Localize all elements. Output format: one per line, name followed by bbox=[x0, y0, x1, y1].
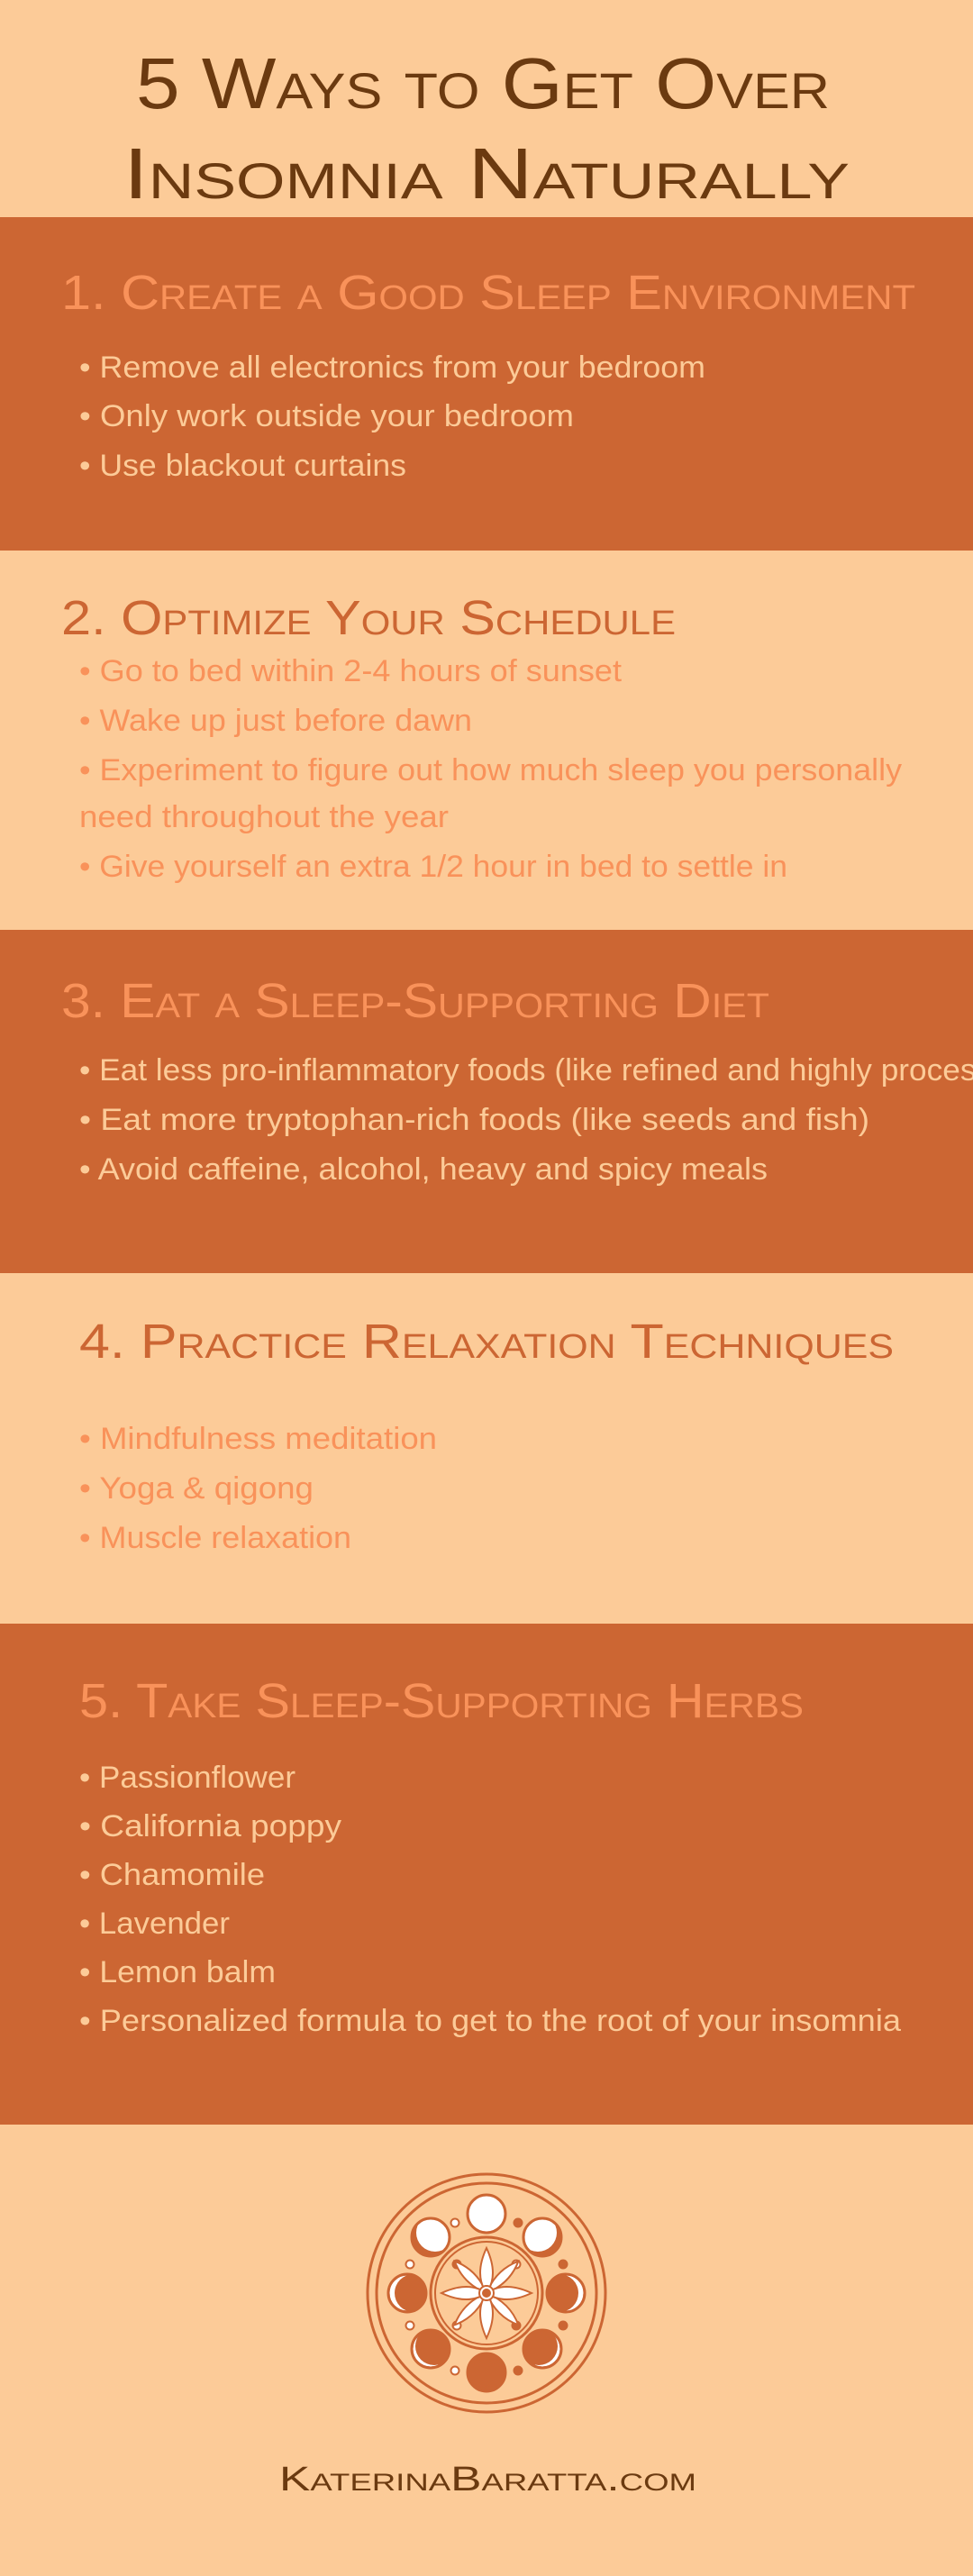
bullets 2: • Wake up just before dawn bbox=[79, 704, 472, 738]
bullets 5: • Passionflower bbox=[79, 1761, 296, 1795]
panel: 3 diet bbox=[0, 930, 973, 1273]
panel: 1 sleep environment bbox=[0, 217, 973, 551]
bullets 2: • Experiment to figure out how much sleep you personally bbox=[79, 753, 902, 787]
bullets 3: • Avoid caffeine, alcohol, heavy and spicy meals bbox=[79, 1152, 768, 1187]
bullets 4 bbox=[79, 1422, 437, 1555]
title bbox=[123, 43, 850, 214]
bullets 3 bbox=[79, 1053, 973, 1187]
bullets 4: • Muscle relaxation bbox=[79, 1521, 351, 1555]
title: 5 Ways to Get Over bbox=[136, 43, 830, 123]
bullets 5: • Personalized formula to get to the root of your insomnia bbox=[79, 2004, 901, 2038]
icon: moon phase logo bbox=[368, 2174, 605, 2412]
bullets 2: • Go to bed within 2-4 hours of sunset bbox=[79, 654, 623, 688]
panel: 4 relaxation bbox=[0, 1273, 973, 1624]
bullets 1: • Only work outside your bedroom bbox=[79, 399, 574, 433]
bullets 5: • California poppy bbox=[79, 1809, 341, 1843]
panel: 5 herbs bbox=[0, 1624, 973, 2125]
bullets 5: • Chamomile bbox=[79, 1858, 265, 1892]
title: Insomnia Naturally bbox=[123, 133, 850, 214]
dots bbox=[405, 2218, 568, 2375]
bullets 5 bbox=[79, 1761, 901, 2038]
bullets 3: • Eat more tryptophan-rich foods (like seeds and fish) bbox=[79, 1103, 869, 1137]
heading 1: 1. Create a Good Sleep Environment bbox=[61, 266, 915, 320]
bullets 2: • Give yourself an extra 1/2 hour in bed to settle in bbox=[79, 850, 787, 884]
bullets 1 bbox=[79, 350, 705, 483]
bullets 4: • Mindfulness meditation bbox=[79, 1422, 437, 1456]
heading 4: 4. Practice Relaxation Techniques bbox=[79, 1315, 894, 1369]
heading 3: 3. Eat a Sleep-Supporting Diet bbox=[61, 974, 769, 1028]
bullets 1: • Remove all electronics from your bedroom bbox=[79, 350, 705, 385]
heading 5: 5. Take Sleep-Supporting Herbs bbox=[79, 1674, 804, 1728]
bullets 1: • Use blackout curtains bbox=[79, 449, 406, 483]
panel: 2 schedule bbox=[0, 551, 973, 930]
bullets 5: • Lavender bbox=[79, 1907, 230, 1941]
bullets 2 bbox=[79, 654, 902, 884]
moons bbox=[388, 2195, 585, 2391]
heading 2: 2. Optimize Your Schedule bbox=[61, 591, 676, 645]
star flower bbox=[441, 2248, 532, 2338]
bullets 5: • Lemon balm bbox=[79, 1955, 276, 1989]
footer: website: KaterinaBaratta.com bbox=[279, 2461, 696, 2499]
bullets 4: • Yoga & qigong bbox=[79, 1471, 314, 1506]
bullets 2: need throughout the year bbox=[79, 800, 449, 834]
